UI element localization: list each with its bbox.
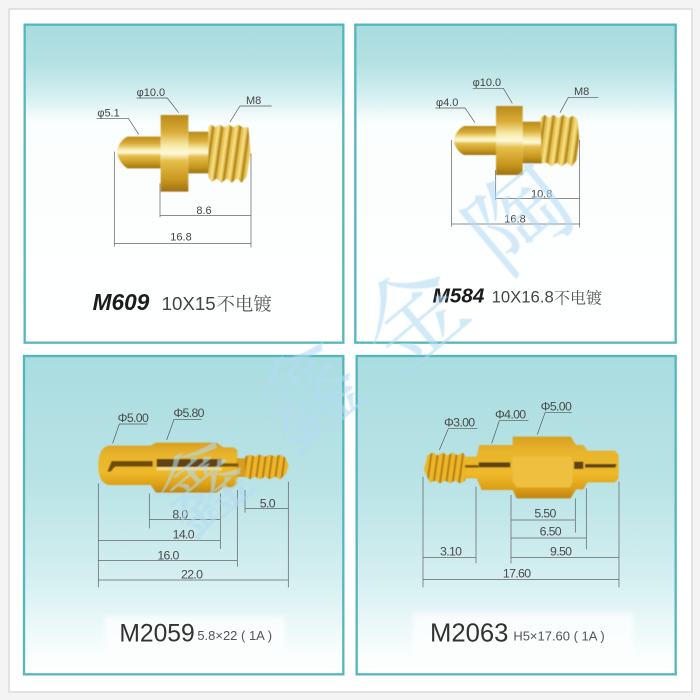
diagonal watermark: 陶	[430, 126, 600, 300]
dimension: 8.0	[149, 493, 220, 528]
dimension: 14.0: 14.0	[173, 528, 195, 542]
caption: M2063: H5×17.60 ( 1A )	[513, 629, 605, 644]
caption: M2059: 5.8×22 ( 1A )	[197, 628, 272, 643]
dimension: 3.10	[423, 477, 476, 563]
dimension: 10.8	[496, 140, 580, 200]
dimension: 8.0: 8.0	[172, 508, 188, 522]
panel: M584	[355, 25, 676, 343]
dimension: 8.6	[160, 153, 251, 220]
caption: M609	[93, 289, 272, 317]
dimension: 16.8: 16.8	[504, 214, 526, 226]
dimension: 6.50: 6.50	[540, 525, 562, 539]
caption backing	[413, 613, 633, 653]
caption: M584: 10X16.8	[492, 288, 554, 307]
dimension: 22.0	[98, 517, 288, 587]
dimension: 16.0: 16.0	[157, 549, 179, 563]
dimension: 5.50	[511, 495, 575, 533]
caption: M609: M609	[93, 289, 150, 315]
caption: M609: 不电镀	[217, 291, 272, 317]
dimension: 16.8: 16.8	[170, 232, 192, 244]
dimension: 14.0	[98, 483, 220, 549]
label: diameter 3.00: Φ3.00	[444, 415, 475, 429]
label: diameter 5.80: Φ5.80	[173, 406, 205, 420]
label: M8 thread: M8	[574, 86, 589, 98]
dimension: 8.6: 8.6	[196, 205, 212, 217]
caption: M584	[433, 285, 602, 308]
caption: M2059: M2059	[119, 621, 195, 648]
part photo: M2063 gold pin	[424, 437, 619, 498]
dimension: 22.0: 22.0	[181, 567, 203, 581]
panel: M609	[25, 25, 343, 343]
caption: M584: 不电镀	[554, 285, 602, 308]
dimension: 10.8: 10.8	[531, 188, 552, 200]
label: diameter 10.0: φ10.0	[473, 77, 501, 89]
part photo: M2059 gold pin	[98, 443, 289, 493]
label: diameter 10.0	[137, 87, 179, 113]
dimension: 16.8	[452, 140, 580, 227]
dimension: 16.0	[98, 490, 237, 567]
dimension: 6.50	[511, 488, 586, 549]
dimension: 5.50: 5.50	[534, 507, 556, 521]
diagonal watermark	[126, 126, 600, 560]
panel: M2059	[24, 356, 343, 674]
dimension: 17.60	[423, 561, 619, 587]
label: diameter 4.00: Φ4.00	[495, 408, 526, 422]
label: diameter 5.80	[167, 406, 205, 440]
label: diameter 5.00: Φ5.00	[541, 399, 572, 413]
diagonal watermark: 鑫	[218, 303, 388, 477]
label: diameter 5.00	[537, 399, 572, 435]
part photo: M584 brass pin	[453, 106, 579, 175]
label: diameter 4.00	[492, 408, 528, 443]
label: M8 thread	[560, 86, 598, 113]
caption: M609: 10X15	[162, 293, 216, 314]
panel: M2063	[357, 356, 676, 674]
diagonal watermark: 鑫	[126, 406, 274, 560]
label: diameter 5.1: φ5.1	[97, 108, 120, 120]
dimension: 5.0: 5.0	[260, 496, 276, 510]
dimension: 9.50	[511, 482, 619, 563]
label: M8 thread	[230, 95, 272, 122]
caption: M584: M584	[433, 285, 485, 308]
dimension: 3.10: 3.10	[440, 544, 462, 558]
dimension: 16.8	[114, 152, 251, 247]
dimension: 5.0	[245, 482, 288, 517]
caption backing	[105, 617, 285, 653]
label: diameter 5.00: Φ5.00	[118, 411, 149, 425]
label: diameter 10.0	[473, 77, 512, 103]
label: diameter 5.1	[97, 108, 139, 134]
label: diameter 4.0: φ4.0	[436, 97, 458, 109]
label: diameter 10.0: φ10.0	[137, 87, 165, 99]
caption: M2063: M2063	[430, 620, 508, 648]
diagonal watermark: 金	[323, 225, 493, 399]
label: diameter 3.00	[439, 415, 477, 450]
caption: M2059	[119, 621, 272, 648]
dimension: 17.60: 17.60	[503, 567, 531, 581]
label: diameter 5.00	[113, 411, 149, 443]
label: diameter 4.0	[435, 97, 475, 123]
part photo: M609 brass pin	[117, 115, 251, 192]
dimension: 9.50: 9.50	[550, 545, 572, 559]
label: M8 thread: M8	[246, 95, 261, 107]
caption: M2063	[430, 620, 605, 648]
